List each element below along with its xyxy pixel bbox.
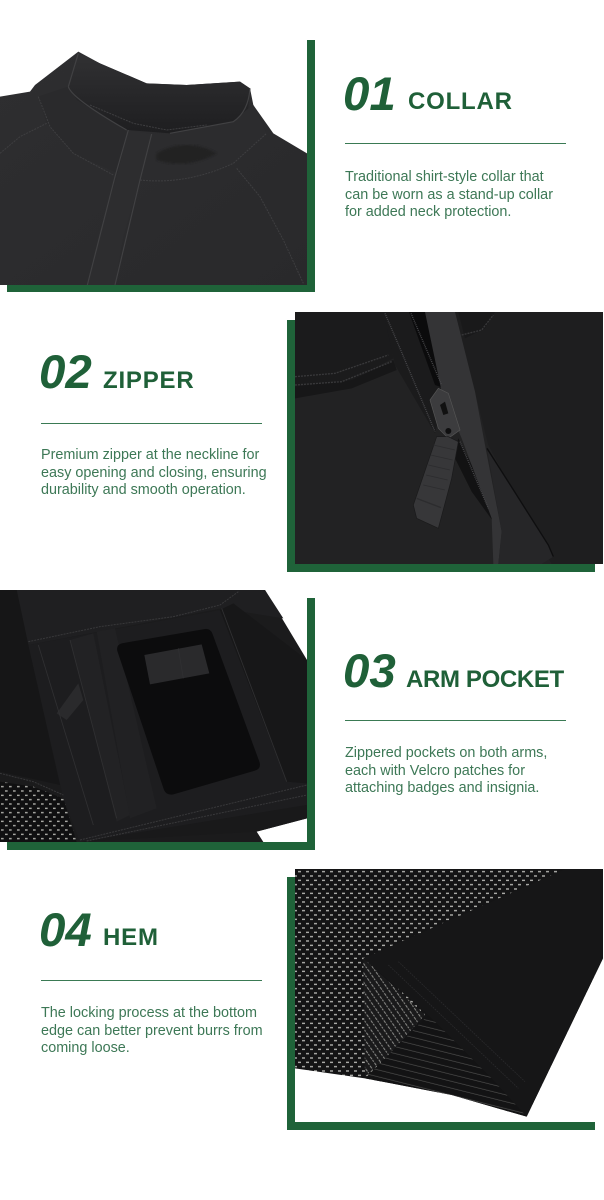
text: hem description: [41, 1005, 263, 1056]
text: arm pocket description: each with Velcro patches for: [345, 762, 525, 778]
heading: collar: COLLAR: [408, 88, 513, 115]
heading: zipper: ZIPPER: [103, 367, 194, 394]
heading: 04: 04: [39, 904, 92, 957]
heading: arm pocket: ARM POCKET: [406, 666, 564, 693]
text: collar description: Traditional shirt-style collar that: [345, 169, 544, 185]
text: zipper description: Premium zipper at the neckline for: [41, 447, 259, 463]
divider rule: [345, 720, 566, 721]
photo: black shirt collar: [0, 52, 307, 285]
text: zipper description: easy opening and closing, ensuring: [41, 464, 267, 480]
panel: 04 hem: [39, 869, 603, 1130]
text: zipper description: [41, 447, 267, 498]
panel: 02 zipper: [39, 312, 603, 572]
text: arm pocket description: [345, 745, 547, 796]
green frame: zipper photo: [287, 320, 595, 572]
text: arm pocket description: Zippered pockets on both arms,: [345, 745, 547, 761]
green frame: hem photo: [287, 877, 595, 1130]
panel: 03 arm pocket: [0, 590, 566, 850]
green frame: collar photo: [7, 40, 315, 292]
text: hem description: coming loose.: [41, 1040, 130, 1056]
text: collar description: can be worn as a stand-up collar: [345, 186, 553, 202]
heading: hem: HEM: [103, 924, 159, 951]
photo: arm pocket with velcro patch: [0, 590, 307, 842]
divider rule: [41, 423, 262, 424]
text: arm pocket description: attaching badges and insignia.: [345, 780, 539, 796]
text: hem description: edge can better prevent burrs from: [41, 1022, 263, 1038]
text: collar description: [345, 169, 553, 220]
heading: 02: 02: [39, 346, 92, 399]
text: collar description: for added neck protection.: [345, 204, 511, 220]
photo: hem with mesh fabric: [295, 869, 603, 1117]
text: zipper description: durability and smooth operation.: [41, 482, 246, 498]
heading: 03: 03: [343, 645, 396, 698]
photo: zipper and pull tab: [295, 312, 603, 564]
divider rule: [41, 980, 262, 981]
divider rule: [345, 143, 566, 144]
green frame: arm pocket photo: [7, 598, 315, 850]
text: hem description: The locking process at the bottom: [41, 1005, 257, 1021]
heading: 01: 01: [343, 68, 396, 121]
panel: 01 collar: [0, 40, 566, 292]
